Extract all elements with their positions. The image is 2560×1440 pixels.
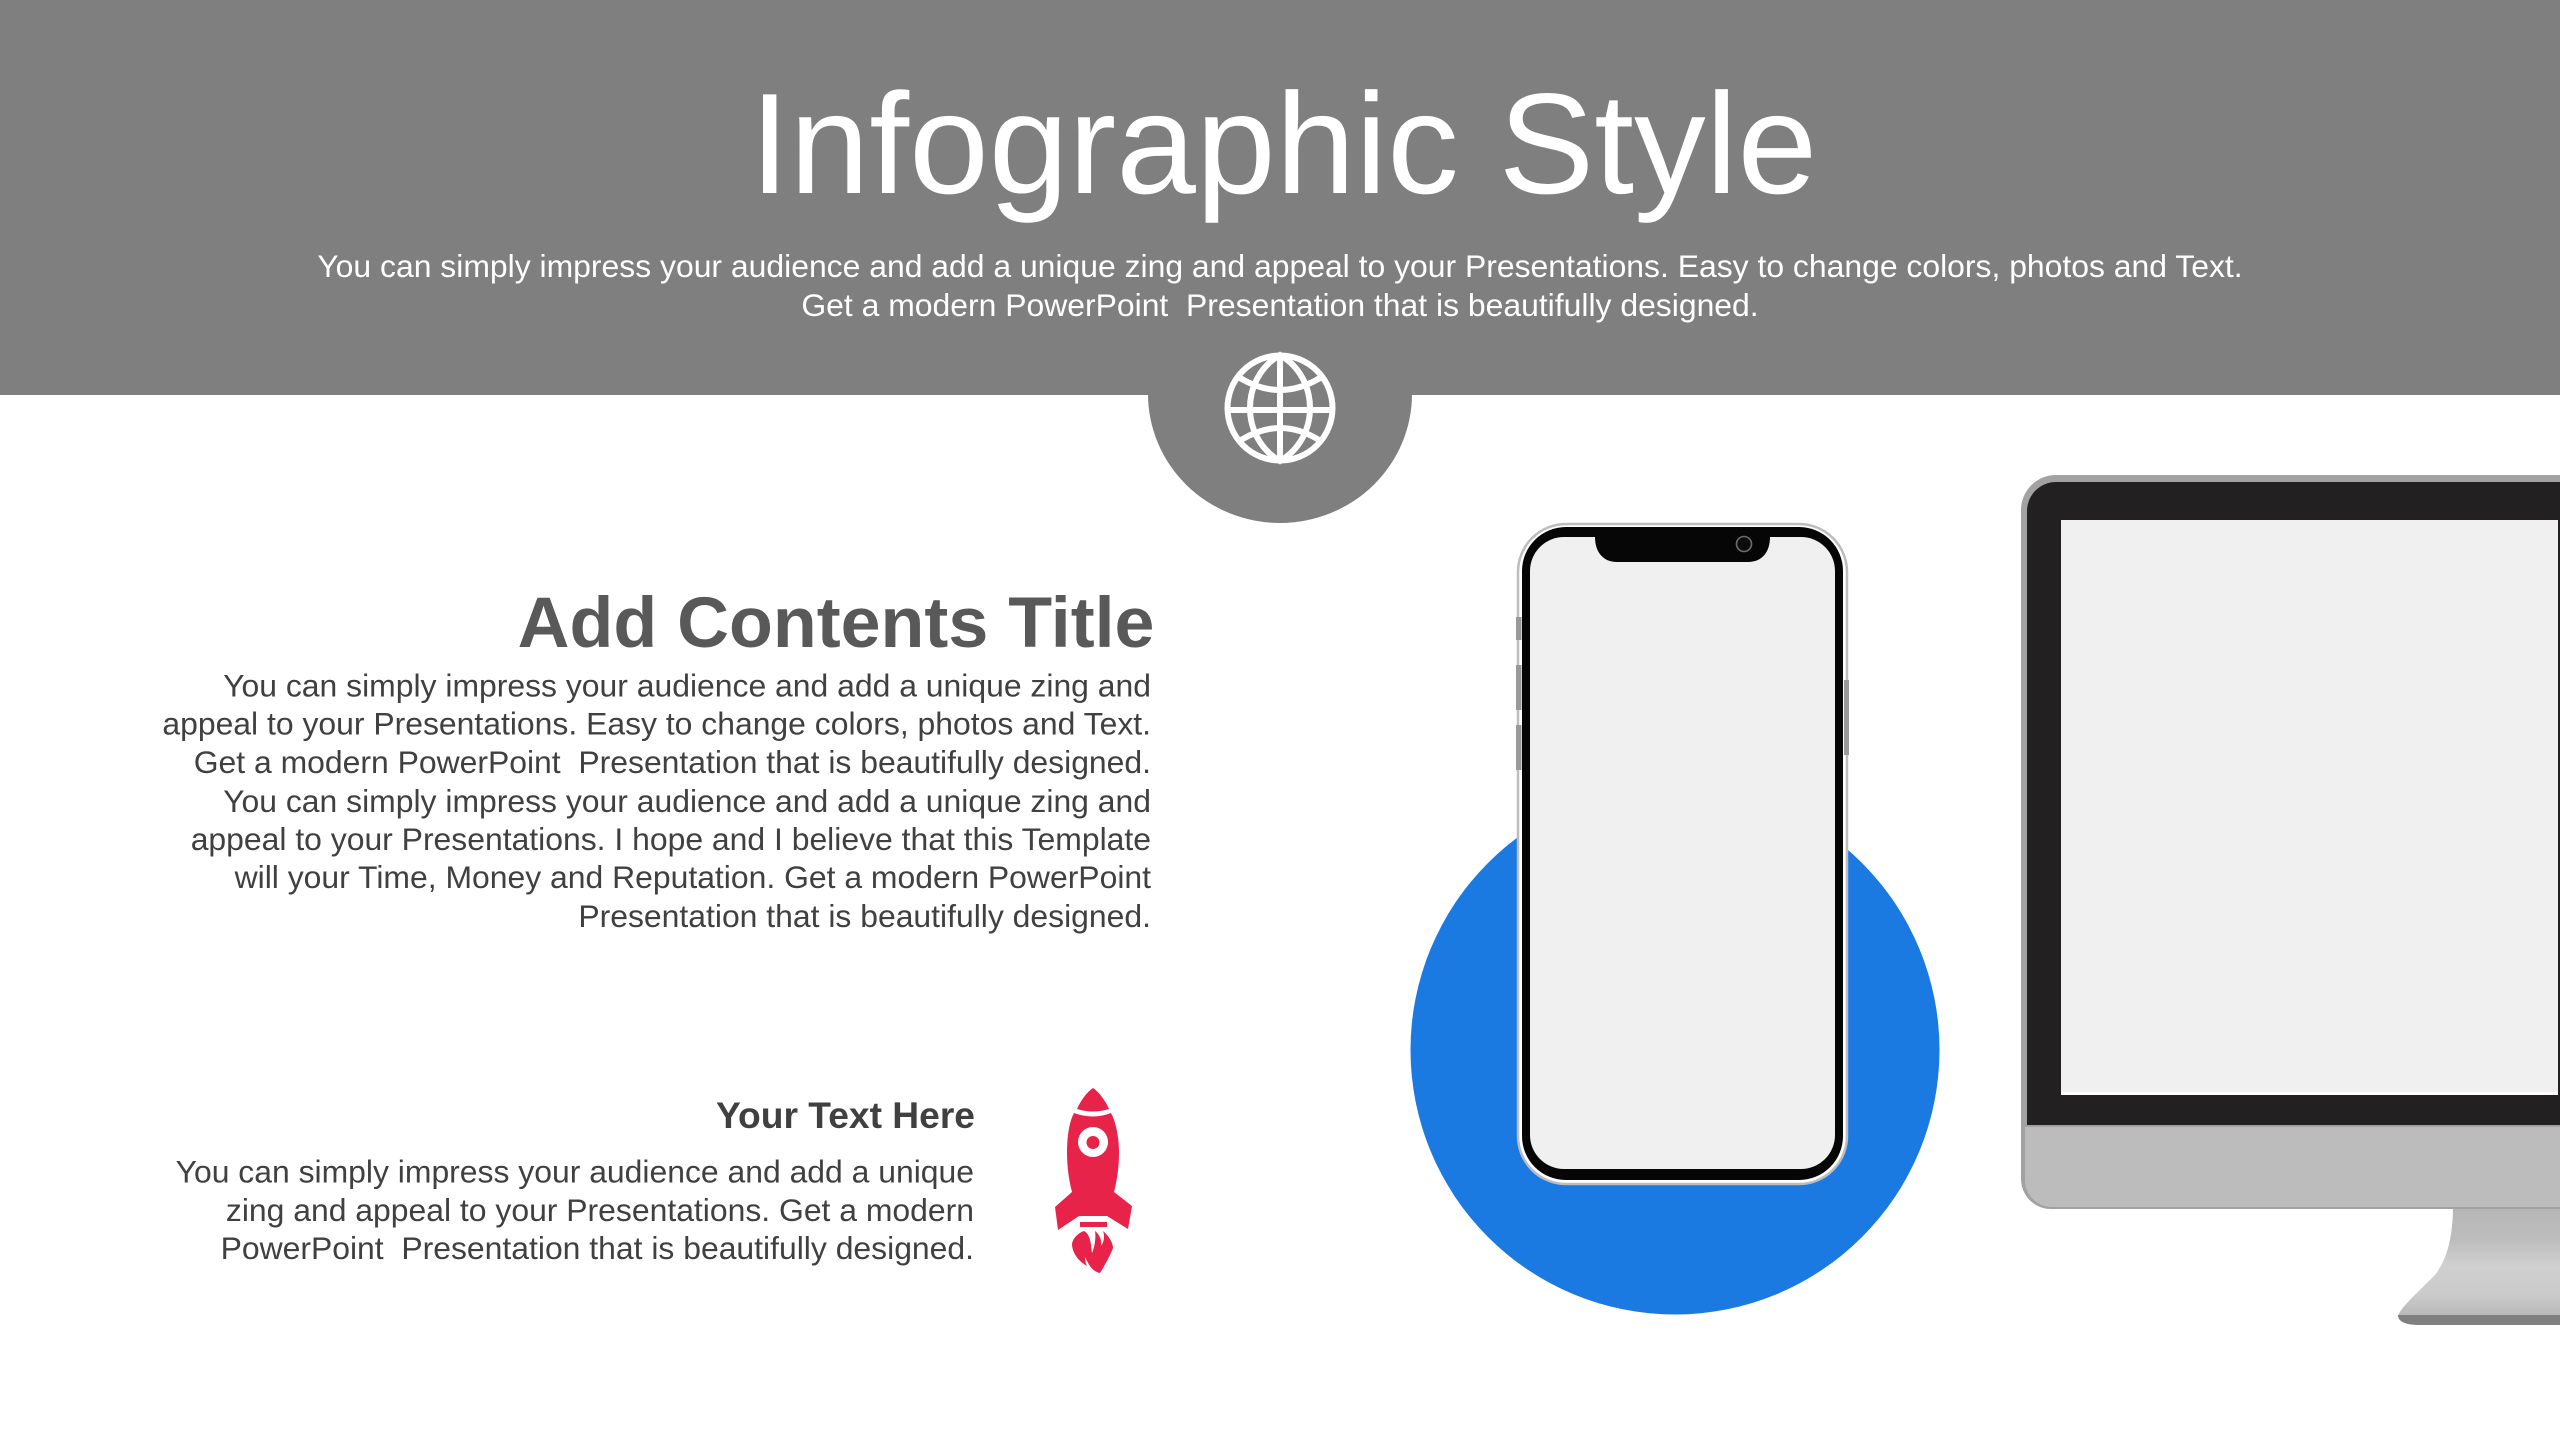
header subtitle: You can simply impress your audience and add a unique zing and appeal to your Presentations. Easy to change colors, photos and Text.: [317, 248, 2243, 284]
body paragraph: Presentation that is beautifully designed.: [578, 898, 1151, 934]
phone body: [1518, 524, 1847, 1184]
body paragraph: Get a modern PowerPoint Presentation that is beautifully designed.: [194, 744, 1151, 780]
desktop monitor: [2021, 475, 2560, 1325]
monitor body: [2021, 475, 2560, 1209]
header semicircle tab: [1148, 394, 1412, 523]
body paragraph: will your Time, Money and Reputation. Get a modern PowerPoint: [234, 859, 1151, 895]
rocket caption: zing and appeal to your Presentations. Get a modern: [226, 1192, 974, 1228]
body paragraph: appeal to your Presentations. Easy to change colors, photos and Text.: [162, 706, 1151, 742]
rocket caption: [176, 1154, 974, 1266]
rocket caption: PowerPoint Presentation that is beautifully designed.: [221, 1230, 974, 1266]
header subtitle: [317, 248, 2243, 323]
monitor screen: [2061, 520, 2558, 1094]
icon: rocket: [1055, 1088, 1132, 1273]
phone side buttons: [1516, 617, 1849, 770]
header band: [0, 0, 2560, 523]
body paragraph: You can simply impress your audience and add a unique zing and: [223, 668, 1151, 704]
body paragraph: [162, 668, 1151, 934]
subheading: your text here: Your Text Here: [716, 1094, 975, 1136]
monitor stand: [2398, 1205, 2560, 1316]
phone screen: [1530, 537, 1835, 1169]
title: Infographic Style: [750, 64, 1817, 224]
body paragraph: appeal to your Presentations. I hope and I believe that this Template: [191, 821, 1151, 857]
phone mockup: [1516, 524, 1849, 1184]
heading: add contents title: Add Contents Title: [518, 583, 1154, 663]
header subtitle: Get a modern PowerPoint Presentation that is beautifully designed.: [801, 287, 1759, 323]
rocket caption: You can simply impress your audience and add a unique: [176, 1154, 974, 1190]
blue circle: [1410, 786, 1940, 1314]
icon: globe: [1227, 355, 1333, 461]
phone camera: [1736, 536, 1752, 552]
body paragraph: You can simply impress your audience and add a unique zing and: [223, 783, 1151, 819]
phone notch: [1595, 537, 1770, 562]
